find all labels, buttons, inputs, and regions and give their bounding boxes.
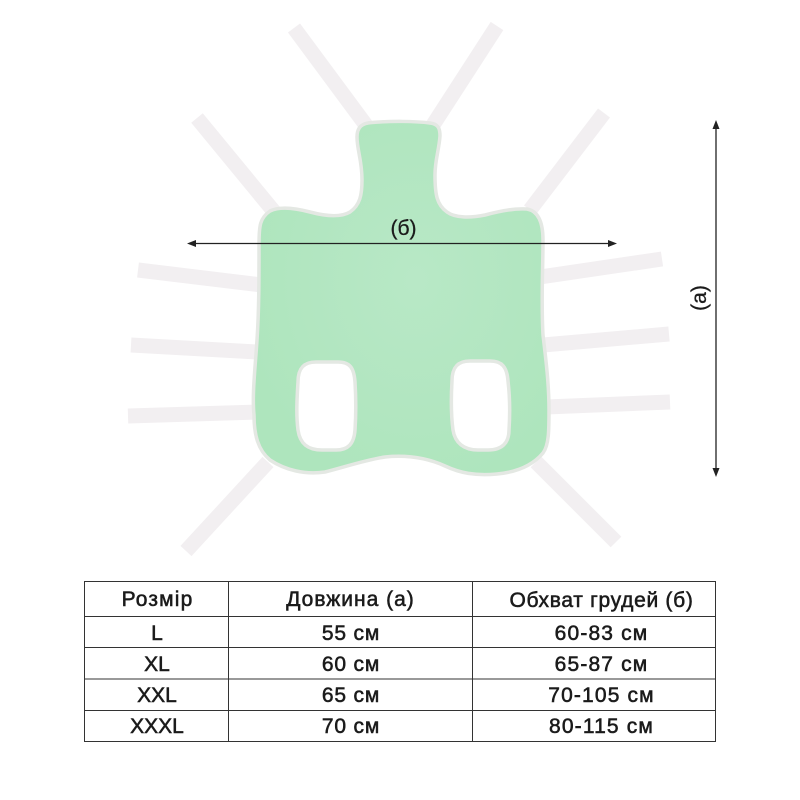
header row: Обхват грудей (б) — [509, 589, 694, 612]
header row: Довжина (а) — [286, 588, 415, 611]
row XXL — [137, 684, 655, 707]
size table — [84, 581, 716, 742]
row L: L — [151, 622, 163, 645]
label: а: (а) — [688, 285, 711, 311]
header row — [122, 588, 694, 612]
row XXL: 70-105 см — [548, 684, 655, 707]
label: б: (б) — [390, 217, 417, 240]
row XL: 65-87 см — [555, 653, 648, 676]
row XXL: XXL — [137, 684, 177, 707]
row XL: XL — [144, 653, 170, 676]
row XXXL: 80-115 см — [549, 715, 654, 738]
row XL — [144, 653, 648, 676]
row XL: 60 см — [322, 653, 380, 676]
row L — [151, 622, 648, 645]
row XXXL: XXXL — [130, 715, 184, 738]
straps — [128, 26, 670, 551]
height arrow (а) — [712, 120, 720, 477]
row XXL: 65 см — [322, 684, 380, 707]
row XXXL — [130, 715, 654, 738]
garment body — [253, 121, 549, 475]
row L: 55 см — [322, 622, 380, 645]
header row: Розмір — [122, 588, 193, 611]
width arrow (б) — [187, 240, 617, 247]
row L: 60-83 см — [555, 622, 648, 645]
row XXXL: 70 см — [322, 715, 380, 738]
